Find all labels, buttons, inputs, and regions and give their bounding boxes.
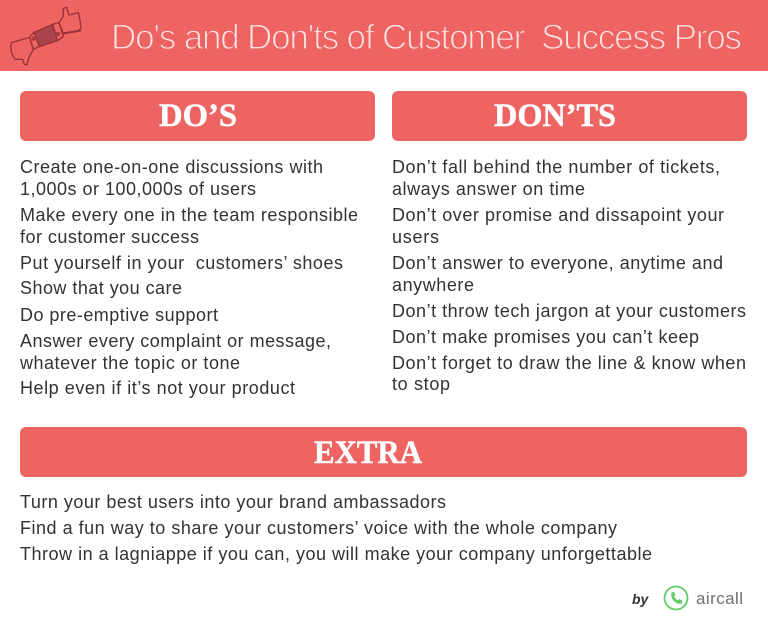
do's list: Put yourself in your customers’ shoes bbox=[20, 253, 343, 273]
heading: don'ts: DON’TS bbox=[494, 98, 616, 134]
do's list: Show that you care bbox=[20, 278, 182, 298]
do's list: Help even if it’s not your product bbox=[20, 378, 295, 398]
extra list: Throw in a lagniappe if you can, you will make your company unforgettable bbox=[20, 544, 652, 564]
don'ts list: to stop bbox=[392, 374, 450, 394]
header banner bbox=[0, 0, 768, 71]
extra list: Find a fun way to share your customers’ voice with the whole company bbox=[20, 518, 617, 538]
do's list: whatever the topic or tone bbox=[19, 353, 240, 373]
don'ts list: users bbox=[392, 227, 439, 247]
do's list: Make every one in the team responsible bbox=[20, 205, 358, 225]
do's list: Do pre-emptive support bbox=[20, 305, 218, 325]
icon: thumbs up and down bbox=[11, 7, 81, 65]
panel: do's bbox=[19, 91, 375, 398]
do's list bbox=[19, 157, 358, 398]
do's list: 1,000s or 100,000s of users bbox=[20, 179, 256, 199]
heading: extra bbox=[20, 427, 747, 477]
title: Do's and Don'ts of Customer Success Pros bbox=[111, 18, 742, 57]
don'ts list bbox=[392, 157, 746, 394]
do's list: Create one-on-one discussions with bbox=[20, 157, 323, 177]
don'ts list: always answer on time bbox=[392, 179, 585, 199]
heading: extra: EXTRA bbox=[314, 435, 422, 471]
don'ts list: Don’t forget to draw the line & know when bbox=[392, 353, 746, 373]
don'ts list: Don’t over promise and dissapoint your bbox=[392, 205, 724, 225]
aircall credit bbox=[632, 586, 743, 610]
do's list: for customer success bbox=[20, 227, 199, 247]
don'ts list: Don’t make promises you can’t keep bbox=[392, 327, 699, 347]
don'ts list: anywhere bbox=[392, 275, 474, 295]
aircall credit: aircall bbox=[696, 589, 743, 608]
do's list: Answer every complaint or message, bbox=[20, 331, 331, 351]
don'ts list: Don’t throw tech jargon at your customers bbox=[392, 301, 746, 321]
heading: don'ts bbox=[392, 91, 747, 141]
aircall credit: by bbox=[632, 591, 650, 607]
heading: do's: DO’S bbox=[159, 98, 237, 134]
don'ts list: Don’t fall behind the number of tickets, bbox=[392, 157, 720, 177]
panel: extra bbox=[20, 427, 747, 564]
extra list: Turn your best users into your brand ambassadors bbox=[20, 492, 446, 512]
heading: do's bbox=[20, 91, 375, 141]
don'ts list: Don’t answer to everyone, anytime and bbox=[392, 253, 723, 273]
icon: aircall phone bbox=[664, 586, 688, 610]
panel: don'ts bbox=[392, 91, 747, 394]
extra list bbox=[20, 492, 652, 564]
